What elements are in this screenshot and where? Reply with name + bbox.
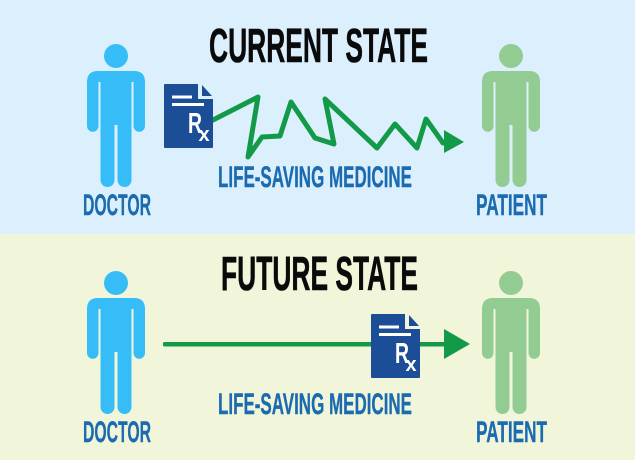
icon: prescription document: x (406, 354, 417, 376)
label: doctor: DOCTOR (83, 416, 151, 449)
icon: doctor figure (87, 44, 145, 187)
heading: future state: FUTURE STATE (221, 248, 418, 301)
arrow: straight path (163, 329, 470, 359)
icon: patient figure (482, 44, 540, 187)
panel: future state (0, 234, 635, 460)
arrow: erratic zigzag path (213, 97, 464, 157)
icon: prescription document: x (198, 124, 210, 146)
icon: prescription document (371, 314, 420, 378)
panel: current state (0, 0, 635, 234)
icon: prescription document (164, 84, 213, 148)
label: life-saving medicine: LIFE-SAVING MEDICINE (218, 161, 412, 194)
label: doctor: DOCTOR (83, 189, 151, 222)
icon: prescription document: R (395, 338, 409, 370)
icon: doctor figure (87, 271, 145, 414)
icon: patient figure (482, 271, 540, 414)
label: life-saving medicine: LIFE-SAVING MEDICINE (218, 388, 412, 421)
icon: prescription document: R (188, 108, 202, 140)
label: patient: PATIENT (476, 189, 547, 222)
heading: current state: CURRENT STATE (209, 20, 428, 73)
label: patient: PATIENT (476, 416, 547, 449)
